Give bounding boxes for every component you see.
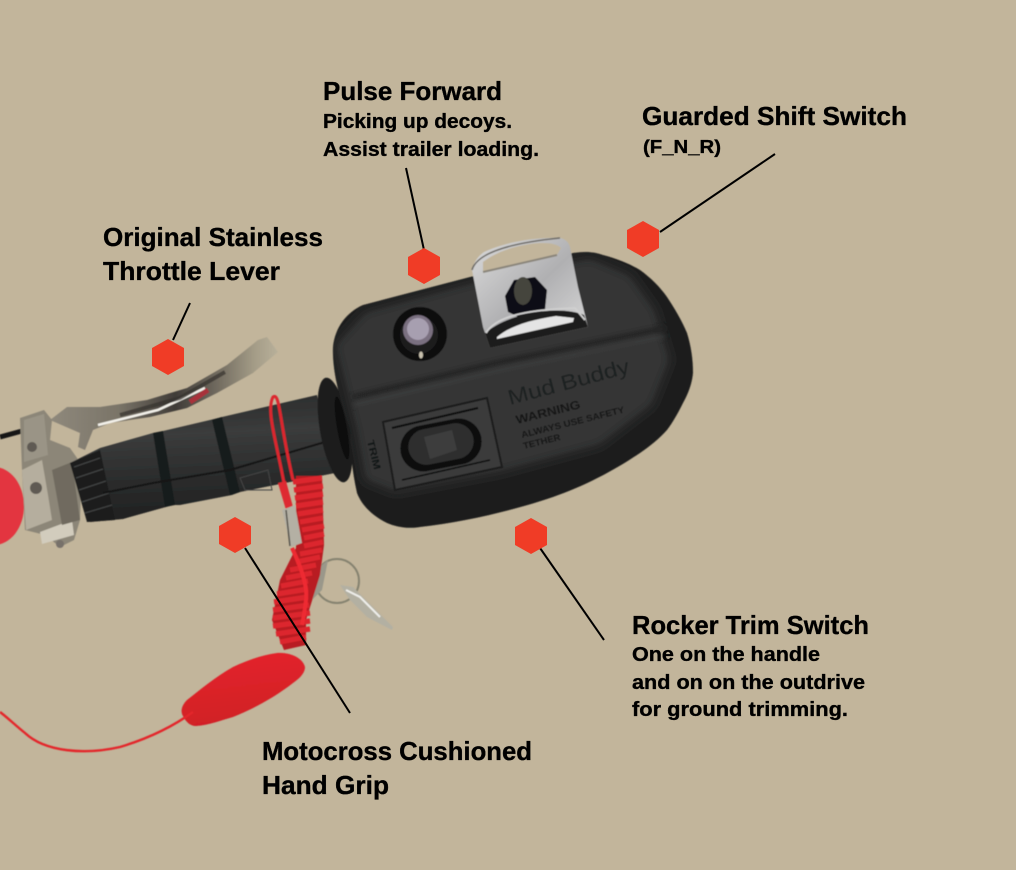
label: hand grip: Hand Grip xyxy=(262,770,389,800)
moulded text on housing: TETHER xyxy=(522,432,562,451)
label: rocker trim switch: Rocker Trim Switch xyxy=(632,610,869,640)
label: rocker trim switch: One on the handle xyxy=(632,644,820,666)
label: guarded shift switch xyxy=(642,101,907,157)
stainless throttle lever xyxy=(50,337,278,450)
leader line: shift switch xyxy=(660,154,775,232)
photo: throttle handle assembly xyxy=(0,238,710,751)
marker: rocker trim xyxy=(515,518,547,554)
safety tether coil xyxy=(271,396,324,650)
moulded text on housing xyxy=(364,355,633,471)
tether loop and tube xyxy=(271,396,293,483)
inner lit face xyxy=(335,258,670,492)
leader line: rocker trim xyxy=(540,548,604,640)
red lanyard wire xyxy=(0,712,193,751)
label: pulse forward: Picking up decoys. xyxy=(323,111,512,133)
marker: pulse forward xyxy=(408,248,440,284)
pulse button xyxy=(393,307,447,361)
grip collar xyxy=(311,375,359,485)
label: pulse forward: Pulse Forward xyxy=(323,76,502,106)
label: hand grip xyxy=(262,736,532,800)
moulded text on housing: Mud Buddy xyxy=(505,355,633,410)
label: guarded shift switch: Guarded Shift Switch xyxy=(642,101,907,131)
label: hand grip: Motocross Cushioned xyxy=(262,736,532,766)
label: pulse forward xyxy=(323,76,539,161)
label: throttle lever: Original Stainless xyxy=(103,222,323,252)
label: guarded shift switch: (F_N_R) xyxy=(643,137,721,157)
moulded text on housing: WARNING xyxy=(514,397,582,427)
remote body xyxy=(332,236,694,528)
ridge highlight xyxy=(353,328,665,397)
label: throttle lever xyxy=(103,222,323,286)
rocker trim switch xyxy=(383,398,502,490)
label: pulse forward: Assist trailer loading. xyxy=(323,139,539,161)
label: throttle lever: Throttle Lever xyxy=(103,256,280,286)
marker: throttle lever xyxy=(152,339,184,375)
moulded text on housing: ALWAYS USE SAFETY xyxy=(520,405,625,440)
red kill switch disc xyxy=(0,467,24,545)
throttle cable xyxy=(0,431,22,437)
metal clamp xyxy=(20,410,82,548)
lanyard ring and clip xyxy=(312,559,393,630)
marker: shift switch xyxy=(627,221,659,257)
marker: hand grip xyxy=(219,517,251,553)
leader line: throttle xyxy=(173,303,190,340)
guarded shift switch bracket xyxy=(472,238,588,348)
label: rocker trim switch: for ground trimming. xyxy=(632,699,848,721)
motocross grip xyxy=(70,395,335,522)
label: rocker trim switch xyxy=(632,610,869,721)
label: rocker trim switch: and on on the outdrive xyxy=(632,672,865,694)
moulded text on housing: TRIM xyxy=(364,439,382,471)
red plug xyxy=(182,653,305,726)
leader line: pulse forward xyxy=(406,168,424,250)
leader line: hand grip xyxy=(245,548,350,713)
